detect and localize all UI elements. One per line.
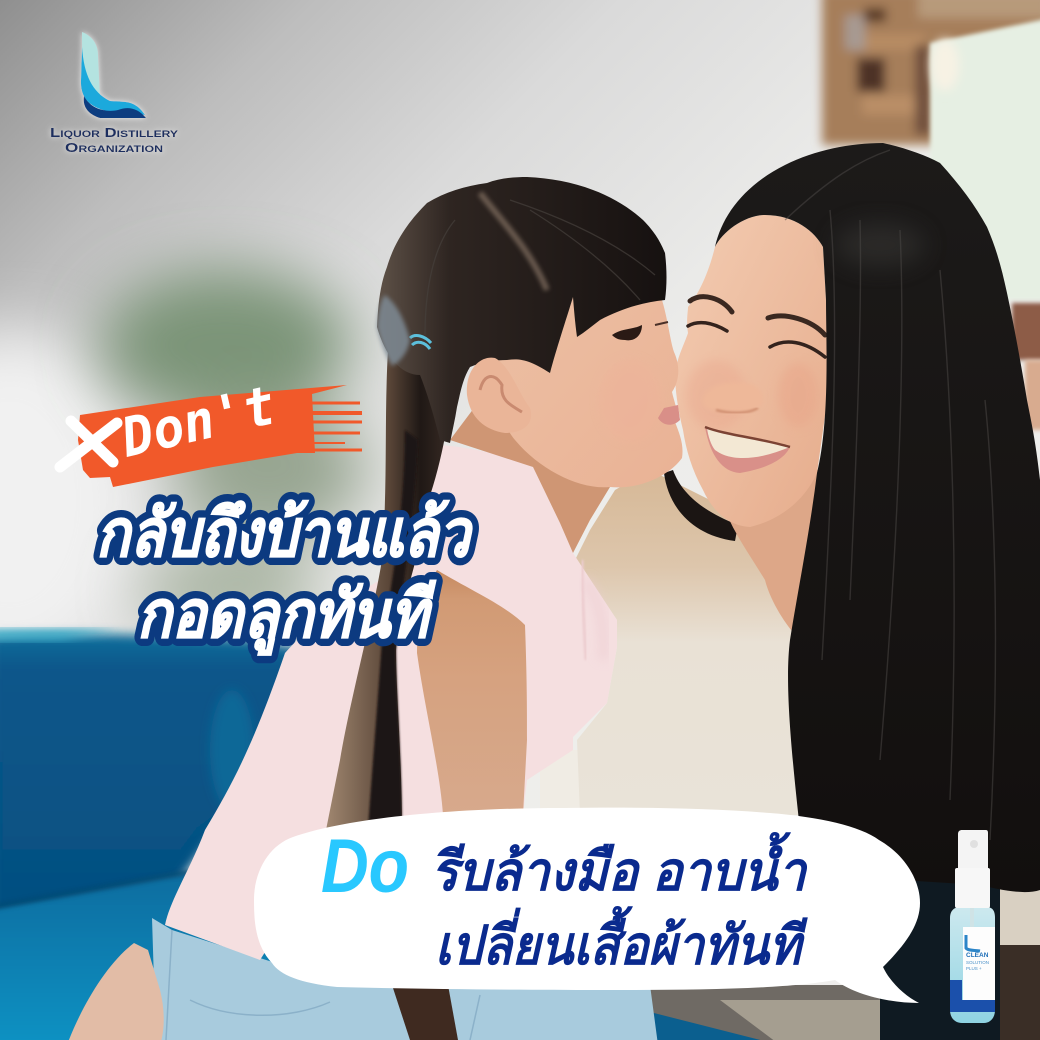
girl figure: [67, 177, 683, 1040]
logo text: Liquor Distillery: [50, 126, 178, 140]
bubble text line 2: เปลี่ยนเสื้อผ้าทันที: [435, 905, 808, 976]
mother mouth: [705, 427, 790, 473]
sofa: [0, 630, 310, 1040]
mother eyes: [688, 323, 825, 357]
mother face: [675, 215, 830, 527]
logo: Organization: [65, 141, 163, 155]
Do label: Do: [321, 824, 409, 909]
girl neck: [450, 400, 650, 553]
logo mark: [81, 32, 146, 118]
mother hair sheen: [785, 150, 995, 840]
icon: product spray bottle: PLUS +: [966, 966, 982, 971]
speech bubble: [254, 808, 920, 1003]
icon: white cross: [60, 421, 117, 467]
Don't label: Don't: [115, 373, 281, 470]
girl hair parting: [480, 193, 547, 290]
girl shirt: [165, 445, 617, 960]
girl hair lower strand: [392, 985, 458, 1040]
girl ponytail: [326, 350, 452, 830]
bubble text line 1: รีบล้างมือ อาบน้ำ: [431, 831, 809, 902]
girl ear: [467, 358, 531, 433]
logo: [50, 32, 178, 155]
girl hair tie: [410, 336, 431, 349]
mother nose: [702, 382, 763, 412]
icon: product spray bottle: [950, 830, 995, 1023]
girl lips: [658, 405, 680, 425]
title line 1: กลับถึงบ้านแล้ว: [96, 496, 473, 570]
ponytail dark strand: [368, 430, 418, 830]
mother hair back strand: [664, 470, 738, 541]
plant blur: [100, 270, 365, 630]
title line 2: กอดลูกทันที: [137, 577, 437, 656]
girl jeans: [152, 918, 658, 1040]
gap behind girl: [540, 750, 590, 815]
mother figure: [540, 143, 1040, 1040]
girl hair: [377, 177, 666, 443]
girl face: [493, 267, 683, 487]
girl bangs highlights: [425, 200, 655, 335]
girl arm: [417, 570, 527, 815]
title line 2: กอดลูกทันที: [137, 577, 437, 656]
mother lower clothing: [640, 985, 1040, 1040]
Don't brush banner: [60, 373, 362, 487]
icon: product spray bottle: SOLUTION: [966, 960, 989, 965]
icon: product spray bottle: CLEAN: [966, 952, 989, 959]
mother shirt: [575, 470, 830, 815]
left hand: [67, 943, 164, 1040]
window and wood frame: [822, 0, 1040, 430]
girl eye: [612, 325, 642, 340]
mother hair: [715, 143, 1040, 892]
mother neck: [725, 470, 825, 640]
title line 1: กลับถึงบ้านแล้ว: [96, 496, 473, 570]
mother brows: [690, 297, 825, 335]
